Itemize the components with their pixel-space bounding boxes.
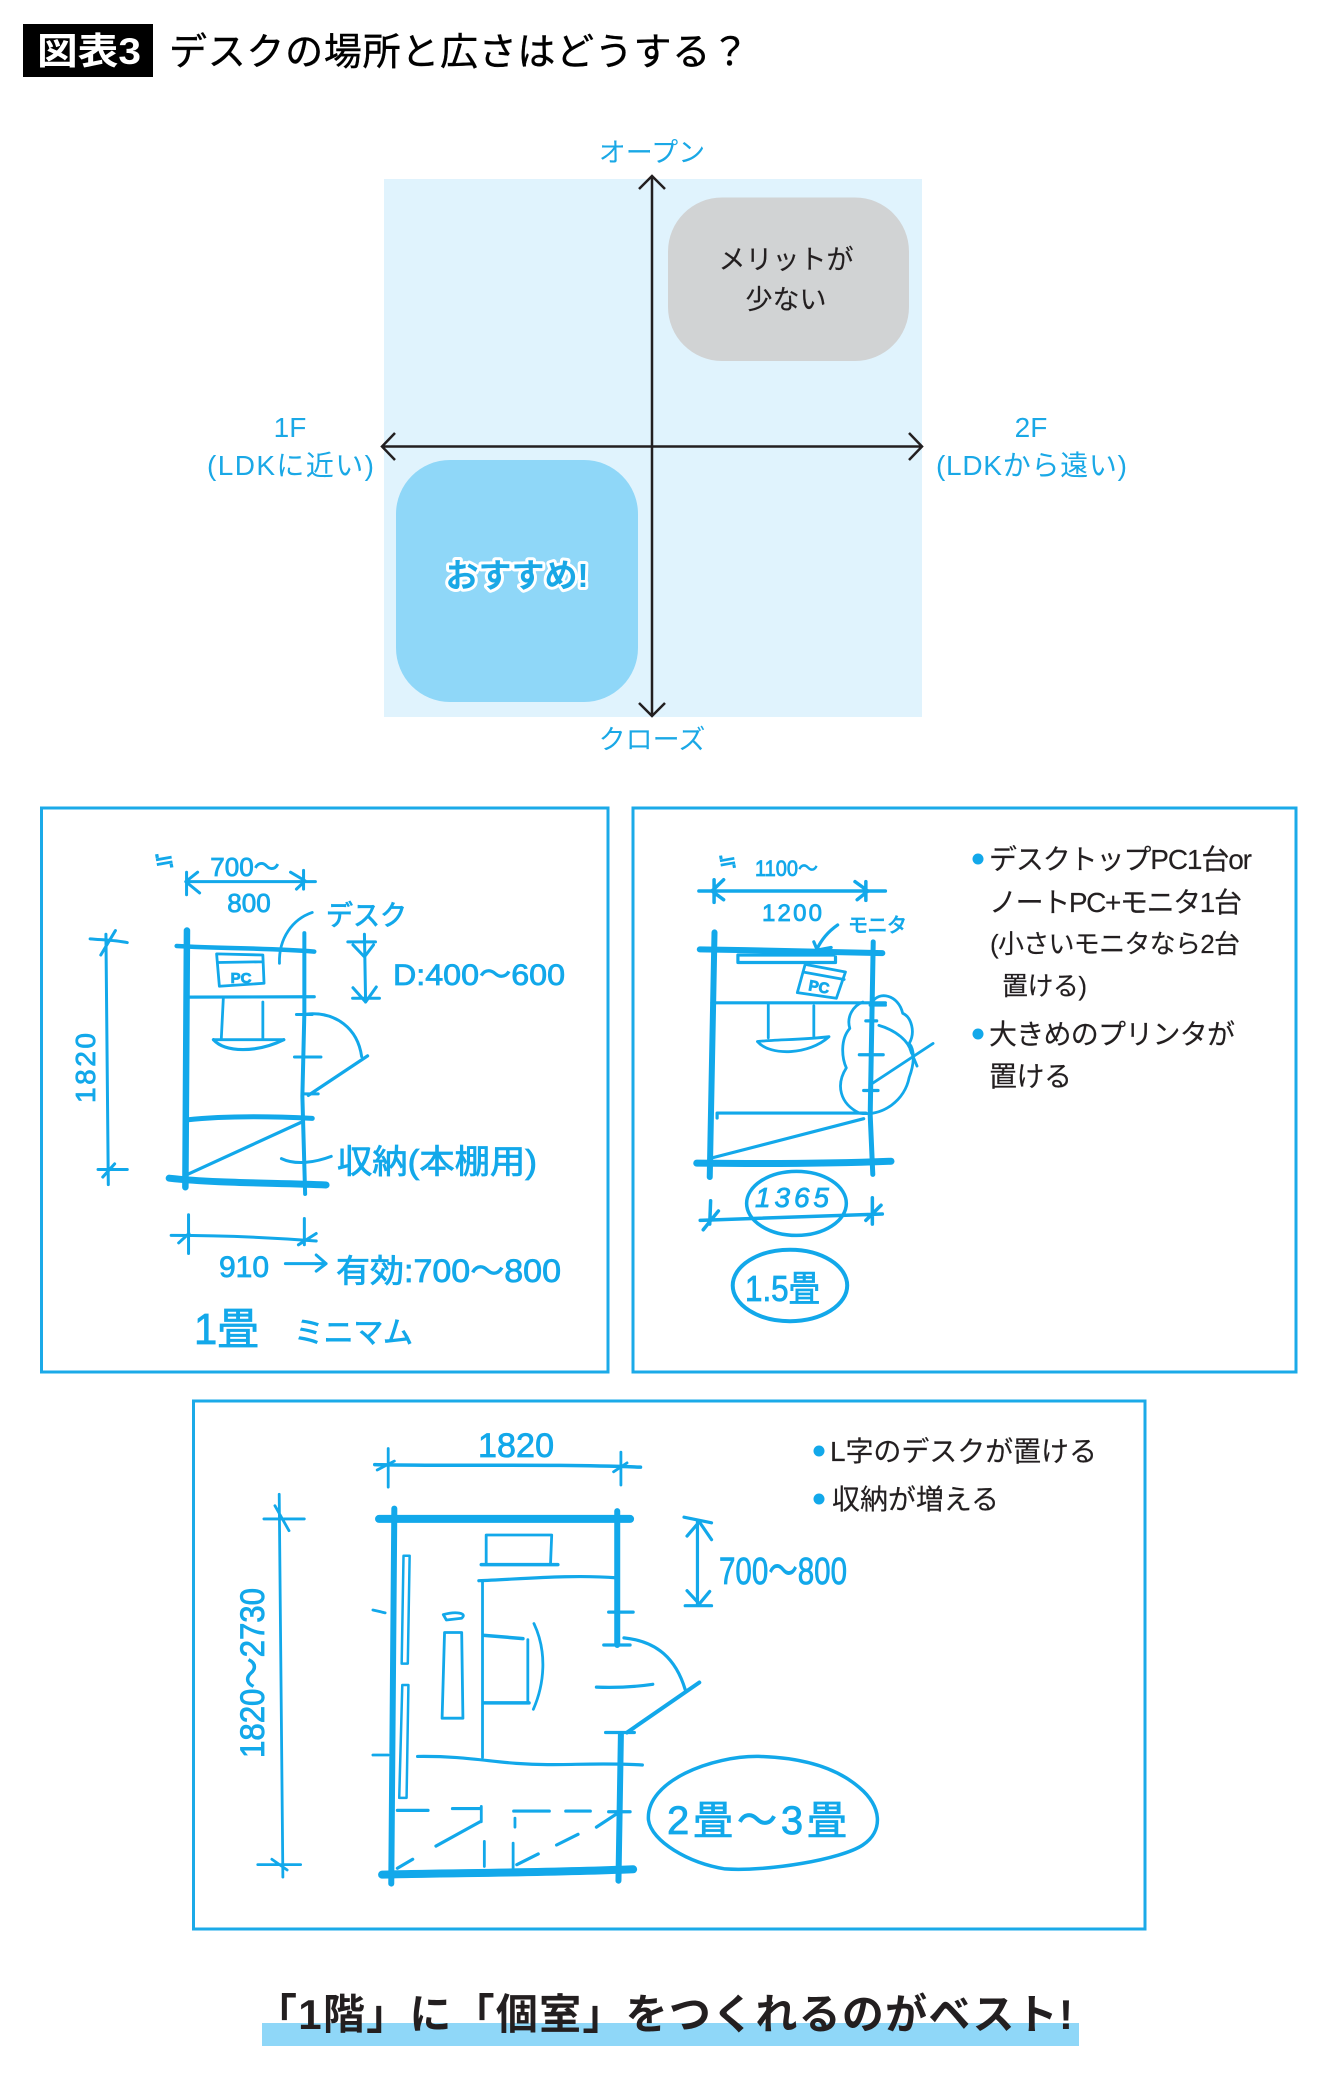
handwritten dimensions: 1 mat: ミニマム: [294, 1317, 413, 1350]
bullet list: 1.5 mats: 置ける): [1002, 971, 1087, 1001]
title badge: 図表3: [37, 31, 141, 72]
handwritten dimensions: 1 mat: 1畳: [194, 1305, 259, 1354]
handwritten dimensions: 1.5 mats: 1365: [755, 1182, 829, 1213]
handwritten dimensions: 1 mat: ≒: [152, 846, 176, 876]
label: 2F: [936, 412, 1127, 481]
handwritten dimensions: 1.5 mats: 1.5畳: [745, 1268, 820, 1309]
handwritten dimensions: 1 mat: PC: [231, 970, 252, 987]
title: [23, 24, 749, 77]
label: open: オープン: [599, 138, 705, 168]
conclusion text: 「1階」に「個室」をつくれるのがベスト!: [255, 1991, 1073, 2038]
bullet list: 2 to 3 mats: 収納が増える: [832, 1484, 999, 1515]
title text: デスクの場所と広さはどうする？: [169, 32, 749, 74]
floor plan sketch: 1.5 mats: [697, 880, 933, 1321]
handwritten dimensions: 1 mat: 1820: [70, 1033, 101, 1103]
handwritten dimensions: 1.5 mats: ≒: [716, 847, 739, 875]
bullet list: 1.5 mats: (小さいモニタなら2台: [990, 929, 1240, 959]
bullet list: 2 to 3 mats: L字のデスクが置ける: [830, 1436, 1097, 1467]
quadrant: recommended: [396, 460, 638, 702]
handwritten dimensions: 1.5 mats: 1100～: [755, 856, 818, 881]
quadrant: recommended: おすすめ!: [446, 557, 588, 594]
handwritten dimensions: 1 mat: 700～: [210, 852, 280, 882]
floor plan sketch: 1 mat: [90, 870, 379, 1271]
bullet list: 1.5 mats: デスクトップPC1台or: [989, 844, 1252, 875]
quadrant: few merits: 少ない: [746, 285, 826, 315]
handwritten dimensions: 1 mat: 800: [227, 888, 271, 918]
quadrant: few merits: [668, 198, 909, 361]
bullet list: 1.5 mats: [972, 844, 1252, 1092]
handwritten dimensions: 1 mat: 収納(本棚用): [337, 1143, 537, 1180]
chart background: [384, 179, 922, 717]
handwritten dimensions: 2 to 3 mats: 1820: [478, 1427, 554, 1465]
panel frame: [633, 808, 1296, 1372]
panel: 1.5 mats: [633, 808, 1296, 1372]
label: closed: クローズ: [599, 725, 705, 755]
axis: vertical arrow: [639, 176, 665, 716]
panel frame: [194, 1401, 1145, 1929]
bullet list: 1.5 mats: ノートPC+モニタ1台: [989, 887, 1242, 918]
bullet list: 1.5 mats: 置ける: [989, 1061, 1072, 1092]
handwritten dimensions: 1 mat: デスク: [326, 900, 407, 931]
axis: horizontal arrow: [382, 433, 922, 460]
handwritten dimensions: 2 to 3 mats: 2畳～3畳: [667, 1799, 847, 1843]
handwritten dimensions: 2 to 3 mats: 700～800: [719, 1551, 847, 1593]
handwritten dimensions: 1.5 mats: [716, 847, 907, 1309]
handwritten dimensions: 1.5 mats: モニタ: [848, 914, 907, 937]
handwritten dimensions: 1.5 mats: PC: [807, 977, 831, 998]
highlight band: [262, 2023, 1079, 2046]
label: 2F: 2F: [1015, 412, 1047, 443]
panel: 1 mat minimum: [42, 808, 608, 1372]
label: 2F: (LDKから遠い): [936, 450, 1127, 481]
bullet list: 1.5 mats: 大きめのプリンタが: [989, 1019, 1235, 1050]
quadrant chart: [207, 138, 1127, 755]
quadrant: few merits: メリットが: [718, 245, 854, 275]
handwritten dimensions: 1 mat: 910: [219, 1251, 269, 1284]
handwritten dimensions: 2 to 3 mats: 1820～2730: [234, 1588, 272, 1758]
panel: 2 to 3 mats: [194, 1401, 1145, 1929]
handwritten dimensions: 2 to 3 mats: [234, 1427, 847, 1843]
bullet list: 2 to 3 mats: [814, 1436, 1097, 1515]
handwritten dimensions: 1 mat: D:400～600: [393, 959, 565, 992]
panel frame: [42, 808, 608, 1372]
handwritten dimensions: 1.5 mats: 1200: [762, 900, 822, 927]
handwritten dimensions: 1 mat: 有効:700～800: [336, 1253, 561, 1289]
title badge: [23, 24, 153, 77]
floor plan sketch: 2 to 3 mats: [258, 1449, 877, 1884]
handwritten dimensions: 1 mat: [70, 846, 565, 1354]
conclusion banner: [255, 1991, 1079, 2046]
label: 1F: 1F: [274, 412, 306, 443]
label: 1F: (LDKに近い): [207, 450, 374, 481]
label: 1F: [207, 412, 374, 481]
